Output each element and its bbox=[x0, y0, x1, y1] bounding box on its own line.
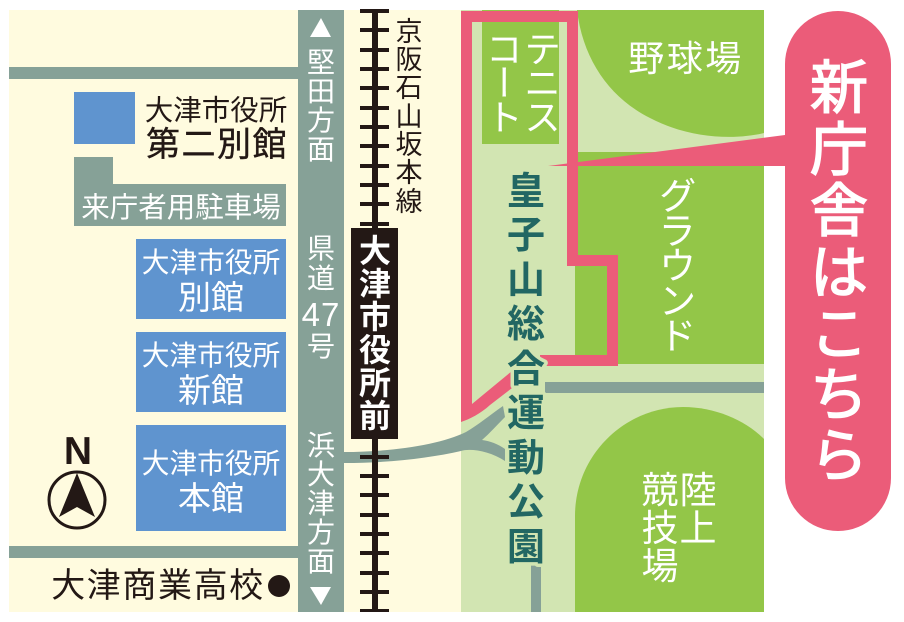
track and field stadium bbox=[575, 407, 764, 612]
tennis court: テニス bbox=[518, 30, 560, 132]
road label: prefectural road 47: 47 bbox=[302, 296, 340, 333]
building: new wing bbox=[136, 332, 286, 412]
label: school: 大津商業高校 bbox=[51, 567, 265, 605]
building: annex bbox=[136, 239, 286, 319]
park name: 皇子山総合運動公園 bbox=[507, 171, 545, 569]
building: main: 大津市役所 bbox=[142, 448, 280, 479]
track and field stadium: 競技場 bbox=[642, 470, 678, 587]
building: annex: 大津市役所 bbox=[142, 247, 280, 278]
railway label: 京阪石山坂本線 bbox=[396, 17, 422, 217]
new building site outline bbox=[461, 11, 618, 422]
label: second annex: 第二別館 bbox=[146, 126, 288, 164]
track and field stadium: 陸上 bbox=[680, 470, 716, 549]
road label: prefectural road 47: 県道 bbox=[307, 233, 335, 294]
baseball field bbox=[577, 10, 764, 137]
tennis court: コート bbox=[480, 30, 522, 132]
compass: N bbox=[64, 430, 92, 473]
map background: town area bbox=[9, 10, 461, 612]
station label bbox=[351, 228, 398, 439]
building: new wing: 大津市役所 bbox=[142, 340, 280, 371]
athletic ground bbox=[575, 152, 764, 364]
building: annex: 別館 bbox=[178, 279, 244, 316]
road label: to Katata: 堅田方面 bbox=[307, 47, 335, 165]
building: main: 本館 bbox=[178, 480, 244, 517]
road label: to Hamaotsu: 浜大津方面 bbox=[307, 430, 335, 577]
tennis court bbox=[480, 10, 560, 144]
road label: prefectural road 47 bbox=[302, 233, 340, 362]
athletic ground: グラウンド bbox=[652, 176, 694, 351]
compass bbox=[49, 430, 105, 528]
callout: new building here: 新庁舎はこちら bbox=[810, 56, 868, 489]
callout: new building here bbox=[548, 11, 891, 531]
station label: 大津市役所前 bbox=[359, 233, 391, 434]
label: second annex: 大津市役所 bbox=[145, 95, 287, 127]
visitor parking: 来庁者用駐車場 bbox=[81, 192, 281, 224]
label: second annex bbox=[145, 95, 288, 164]
road label: prefectural road 47: 号 bbox=[307, 331, 335, 362]
building: new wing: 新館 bbox=[178, 372, 244, 409]
building: second annex bbox=[74, 92, 135, 144]
railway bbox=[360, 9, 389, 612]
building: main bbox=[136, 425, 286, 531]
map background: park area bbox=[461, 10, 764, 612]
baseball field: 野球場 bbox=[628, 38, 744, 79]
visitor parking bbox=[74, 157, 286, 226]
